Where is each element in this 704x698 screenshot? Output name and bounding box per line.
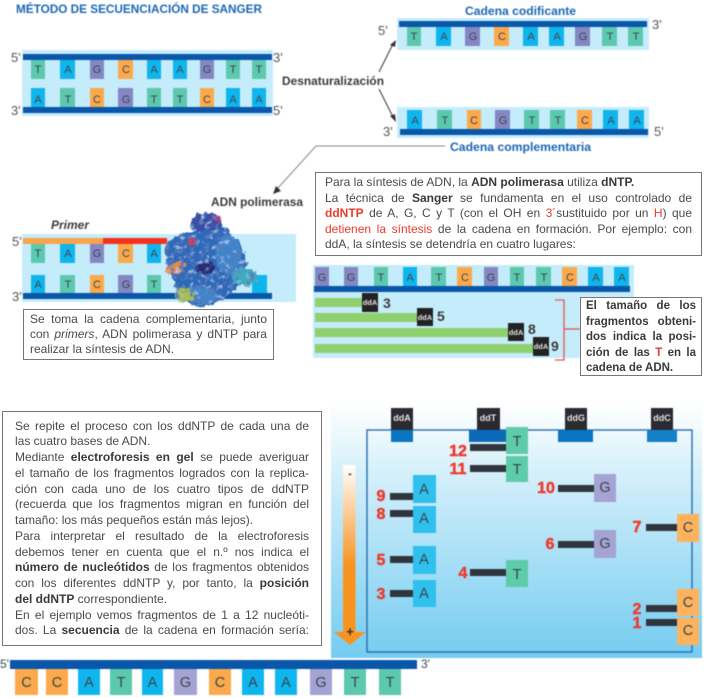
nucleotide sequence strip: T <box>436 272 443 284</box>
arrow: migration direction: + <box>346 624 354 639</box>
double-stranded DNA: A <box>150 64 158 76</box>
resulting sequence strand: T <box>351 675 360 691</box>
label: primer: Primer <box>51 218 90 232</box>
heading: cadena complementaria: Cadena complementaria <box>450 140 591 154</box>
ddA fragments: 5 <box>437 308 445 324</box>
DNA synthesis strand <box>12 234 296 304</box>
gel column: ddT bands: 12 <box>449 443 467 460</box>
text box: Sanger technique: Para la síntesis de ADN, la ADN polimerasa utiliza dNTP. <box>325 175 634 189</box>
text box: fragment size: fragmentos obteni- <box>586 316 696 328</box>
resulting sequence strand: A <box>148 675 158 691</box>
title: MÉTODO DE SECUENCIACIÓN DE SANGER <box>16 1 262 16</box>
double-stranded DNA: A <box>64 64 72 76</box>
resulting sequence strand: A <box>84 675 94 691</box>
nucleotide sequence strip: C <box>566 272 574 284</box>
ddA fragments: ddA <box>534 342 549 351</box>
coding strand: 5' <box>378 23 388 38</box>
gel column: ddG bands: 10 <box>537 480 555 497</box>
ddA fragments: ddA <box>509 328 524 337</box>
arrow: migration direction: - <box>348 468 352 480</box>
DNA synthesis strand: C <box>122 248 130 260</box>
nucleotide sequence strip: T <box>541 272 548 284</box>
DNA synthesis strand: T <box>35 248 42 260</box>
double-stranded DNA: 5' <box>273 103 283 118</box>
arrow: complementary strand to synthesis <box>273 146 445 194</box>
gel column: ddT bands <box>449 427 528 587</box>
DNA synthesis strand: A <box>64 248 72 260</box>
complementary strand: T <box>442 115 449 127</box>
text box: fragment size: cadena de ADN. <box>586 362 673 374</box>
gel column: ddG bands: G <box>599 480 611 496</box>
gel column: ddG bands <box>537 474 616 558</box>
DNA synthesis strand: A <box>150 248 158 260</box>
complementary strand: T <box>529 115 536 127</box>
text box: electrophoresis: ción con cada uno de los cuatro tipos de ddNTP <box>15 482 309 496</box>
gel column: ddA bands: A <box>419 552 429 568</box>
complementary strand: A <box>633 115 641 127</box>
label: desnaturalización: Desnaturalización <box>282 74 384 88</box>
double-stranded DNA: T <box>151 94 158 106</box>
gel column: ddC bands: C <box>683 623 693 639</box>
nucleotide sequence strip: A <box>406 272 414 284</box>
gel column: ddC bands: C <box>683 520 693 536</box>
gel column: ddA bands: 3 <box>377 586 386 603</box>
text box: Sanger technique: ddA, la síntesis se detendría en cuatro lugares: <box>325 237 576 251</box>
arrow: migration direction <box>334 465 366 645</box>
nucleotide sequence strip: T <box>514 272 521 284</box>
coding strand: T <box>411 31 418 43</box>
double-stranded DNA: 3' <box>273 50 283 65</box>
text box: electrophoresis: del ddNTP correspondiente. <box>15 592 167 606</box>
double-stranded DNA <box>11 50 283 118</box>
text box: electrophoresis: número de nucleótidos de los fragmentos obtenidos <box>15 560 309 574</box>
ddA fragments: 3 <box>383 295 391 311</box>
double-stranded DNA: T <box>177 94 184 106</box>
gel wells: ddT <box>480 413 497 423</box>
ddA fragments: 9 <box>551 338 559 354</box>
gel column: ddT bands: 11 <box>450 461 467 478</box>
text box: complementary chain <box>23 309 274 360</box>
gel wells <box>391 408 677 442</box>
DNA synthesis strand: A <box>34 279 42 291</box>
nucleotide sequence strip: A <box>618 272 626 284</box>
resulting sequence strand: C <box>21 675 32 691</box>
DNA synthesis strand: C <box>93 279 101 291</box>
resulting sequence strand: 5' <box>0 657 9 671</box>
coding strand: G <box>469 31 477 43</box>
text box: Sanger technique: detienen la síntesis de la cadena en formación. Por ejemplo: con <box>325 222 692 236</box>
nucleotide sequence strip: C <box>461 272 469 284</box>
ddA fragments: ddA <box>418 313 433 322</box>
ddA fragments <box>315 293 559 356</box>
text box: electrophoresis: Se repite el proceso con los ddNTP de cada una de <box>15 418 309 432</box>
text box: fragment size: dos indica la posi- <box>586 331 696 343</box>
resulting sequence strand: T <box>117 675 126 691</box>
resulting sequence strand: G <box>315 675 327 691</box>
text box: fragment size: El tamaño de los <box>586 300 696 312</box>
gel column: ddA bands: 9 <box>377 488 386 505</box>
text box: electrophoresis <box>2 411 322 646</box>
DNA synthesis strand: T <box>151 279 158 291</box>
text box: Sanger technique: La técnica de Sanger se fundamenta en el uso controlado de <box>325 190 692 204</box>
coding strand: T <box>607 31 614 43</box>
red bracket <box>555 300 564 360</box>
gel inner frame <box>367 430 692 652</box>
double-stranded DNA: A <box>34 94 42 106</box>
gel column: ddG bands: G <box>599 536 611 552</box>
nucleotide sequence strip <box>313 265 634 358</box>
text box: electrophoresis: Mediante electroforesis en gel se puede averiguar <box>15 450 309 464</box>
gel column: ddC bands: C <box>683 595 693 611</box>
gel column: ddC bands: 7 <box>633 519 642 536</box>
double-stranded DNA: C <box>93 94 101 106</box>
nucleotide sequence strip: G <box>487 272 495 284</box>
gel column: ddT bands: T <box>513 567 522 583</box>
gel column: ddT bands: T <box>513 434 522 450</box>
text box: fragment size: ción de las T en la <box>586 346 696 358</box>
double-stranded DNA: G <box>122 94 130 106</box>
nucleotide sequence strip: T <box>378 272 385 284</box>
DNA synthesis strand: 3' <box>12 289 22 304</box>
resulting sequence strand: C <box>52 675 62 691</box>
coding strand: A <box>440 31 448 43</box>
double-stranded DNA: A <box>176 64 184 76</box>
DNA synthesis strand: 5' <box>12 234 22 249</box>
resulting sequence strand: C <box>215 675 225 691</box>
double-stranded DNA: 3' <box>11 103 21 118</box>
double-stranded DNA: T <box>65 94 72 106</box>
complementary strand: T <box>555 115 562 127</box>
DNA synthesis strand: G <box>122 279 130 291</box>
gel column: ddT bands: 4 <box>459 565 468 582</box>
nucleotide sequence strip: A <box>592 272 600 284</box>
text box: electrophoresis: (recuerda que los fragmentos migran en función del <box>15 497 309 511</box>
text box: complementary chain: Se toma la cadena complementaria, junto <box>30 312 267 326</box>
double-stranded DNA: T <box>35 64 42 76</box>
text box: complementary chain: con primers, ADN polimerasa y dNTP para <box>30 327 267 341</box>
gel column: ddA bands: A <box>419 586 429 602</box>
gel column: ddG bands: 6 <box>546 536 555 553</box>
coding strand: C <box>498 31 506 43</box>
DNA synthesis strand: T <box>65 279 72 291</box>
text box: Sanger technique <box>315 172 702 256</box>
text box: electrophoresis: dos. La secuencia de la cadena en formación sería: <box>15 623 309 637</box>
double-stranded DNA: A <box>255 94 263 106</box>
label: ADN polimerasa: ADN polimerasa <box>211 195 303 209</box>
text box: electrophoresis: las cuatro bases de ADN. <box>15 434 150 448</box>
text box: electrophoresis: debemos tener en cuenta que el n.º nos indica el <box>15 544 309 558</box>
gel column: ddA bands: 8 <box>377 506 386 523</box>
text box: electrophoresis: tamaño: los más pequeños están más lejos). <box>15 513 253 527</box>
complementary strand: C <box>581 115 589 127</box>
coding strand <box>378 17 662 50</box>
complementary strand: 3' <box>383 124 393 139</box>
complementary strand <box>383 107 664 139</box>
arrow: to coding strand <box>379 40 396 72</box>
double-stranded DNA: G <box>93 64 101 76</box>
bracket connector <box>564 328 580 330</box>
resulting sequence strand: A <box>281 675 291 691</box>
double-stranded DNA: T <box>230 64 237 76</box>
gel column: ddA bands: A <box>419 511 429 527</box>
text box: electrophoresis: con los diferentes ddNTP y, por tanto, la posición <box>15 576 309 590</box>
double-stranded DNA: A <box>229 94 237 106</box>
coding strand: 3' <box>652 17 662 32</box>
complementary strand: G <box>499 115 507 127</box>
gel column: ddA bands <box>377 475 436 607</box>
coding strand: T <box>633 31 640 43</box>
text box: Sanger technique: ddNTP de A, G, C y T (con el OH en 3´sustituido por un H) que <box>325 206 692 220</box>
gel wells: ddG <box>567 413 585 423</box>
coding strand: A <box>553 31 561 43</box>
text box: electrophoresis: En el ejemplo vemos fragmentos de 1 a 12 nucleóti- <box>15 608 309 622</box>
text box: electrophoresis: Para interpretar el resultado de la electroforesis <box>15 529 309 543</box>
text box: complementary chain: realizar la síntesis de ADN. <box>30 342 174 356</box>
coding strand: G <box>579 31 587 43</box>
gel wells: ddA <box>393 413 411 423</box>
gel wells: ddC <box>653 413 671 423</box>
complementary strand: A <box>411 115 419 127</box>
complementary strand: C <box>470 115 478 127</box>
DNA synthesis strand: G <box>93 248 101 260</box>
icon: DNA polymerase protein <box>164 212 257 308</box>
double-stranded DNA: C <box>203 94 211 106</box>
double-stranded DNA: 5' <box>11 50 21 65</box>
complementary strand: 5' <box>654 124 664 139</box>
double-stranded DNA: T <box>256 64 263 76</box>
gel column: ddC bands: 1 <box>633 615 642 632</box>
text box: fragment size <box>580 297 702 376</box>
arrow: to complementary strand <box>379 89 396 122</box>
resulting sequence strand: 3' <box>421 657 430 671</box>
double-stranded DNA: C <box>122 64 130 76</box>
text box: electrophoresis: el tamaño de los fragmentos logrados con la replica- <box>15 466 309 480</box>
coding strand: A <box>527 31 535 43</box>
resulting sequence strand: G <box>180 675 191 691</box>
resulting sequence strand: A <box>248 675 258 691</box>
gel column: ddC bands <box>633 514 699 645</box>
heading: cadena codificante: Cadena codificante <box>465 4 576 18</box>
ddA fragments: 8 <box>528 321 536 337</box>
gel column: ddA bands: 5 <box>377 552 386 569</box>
nucleotide sequence strip: G <box>347 272 355 284</box>
gel panel background <box>331 404 702 658</box>
complementary strand: A <box>607 115 615 127</box>
resulting sequence strand: T <box>386 675 395 691</box>
gel column: ddA bands: A <box>419 482 429 498</box>
double-stranded DNA: G <box>203 64 211 76</box>
gel column: ddT bands: T <box>513 462 522 478</box>
ddA fragments: ddA <box>363 298 378 307</box>
gel column: ddC bands: 2 <box>633 601 642 618</box>
resulting sequence strand <box>0 657 430 695</box>
nucleotide sequence strip: G <box>318 272 326 284</box>
